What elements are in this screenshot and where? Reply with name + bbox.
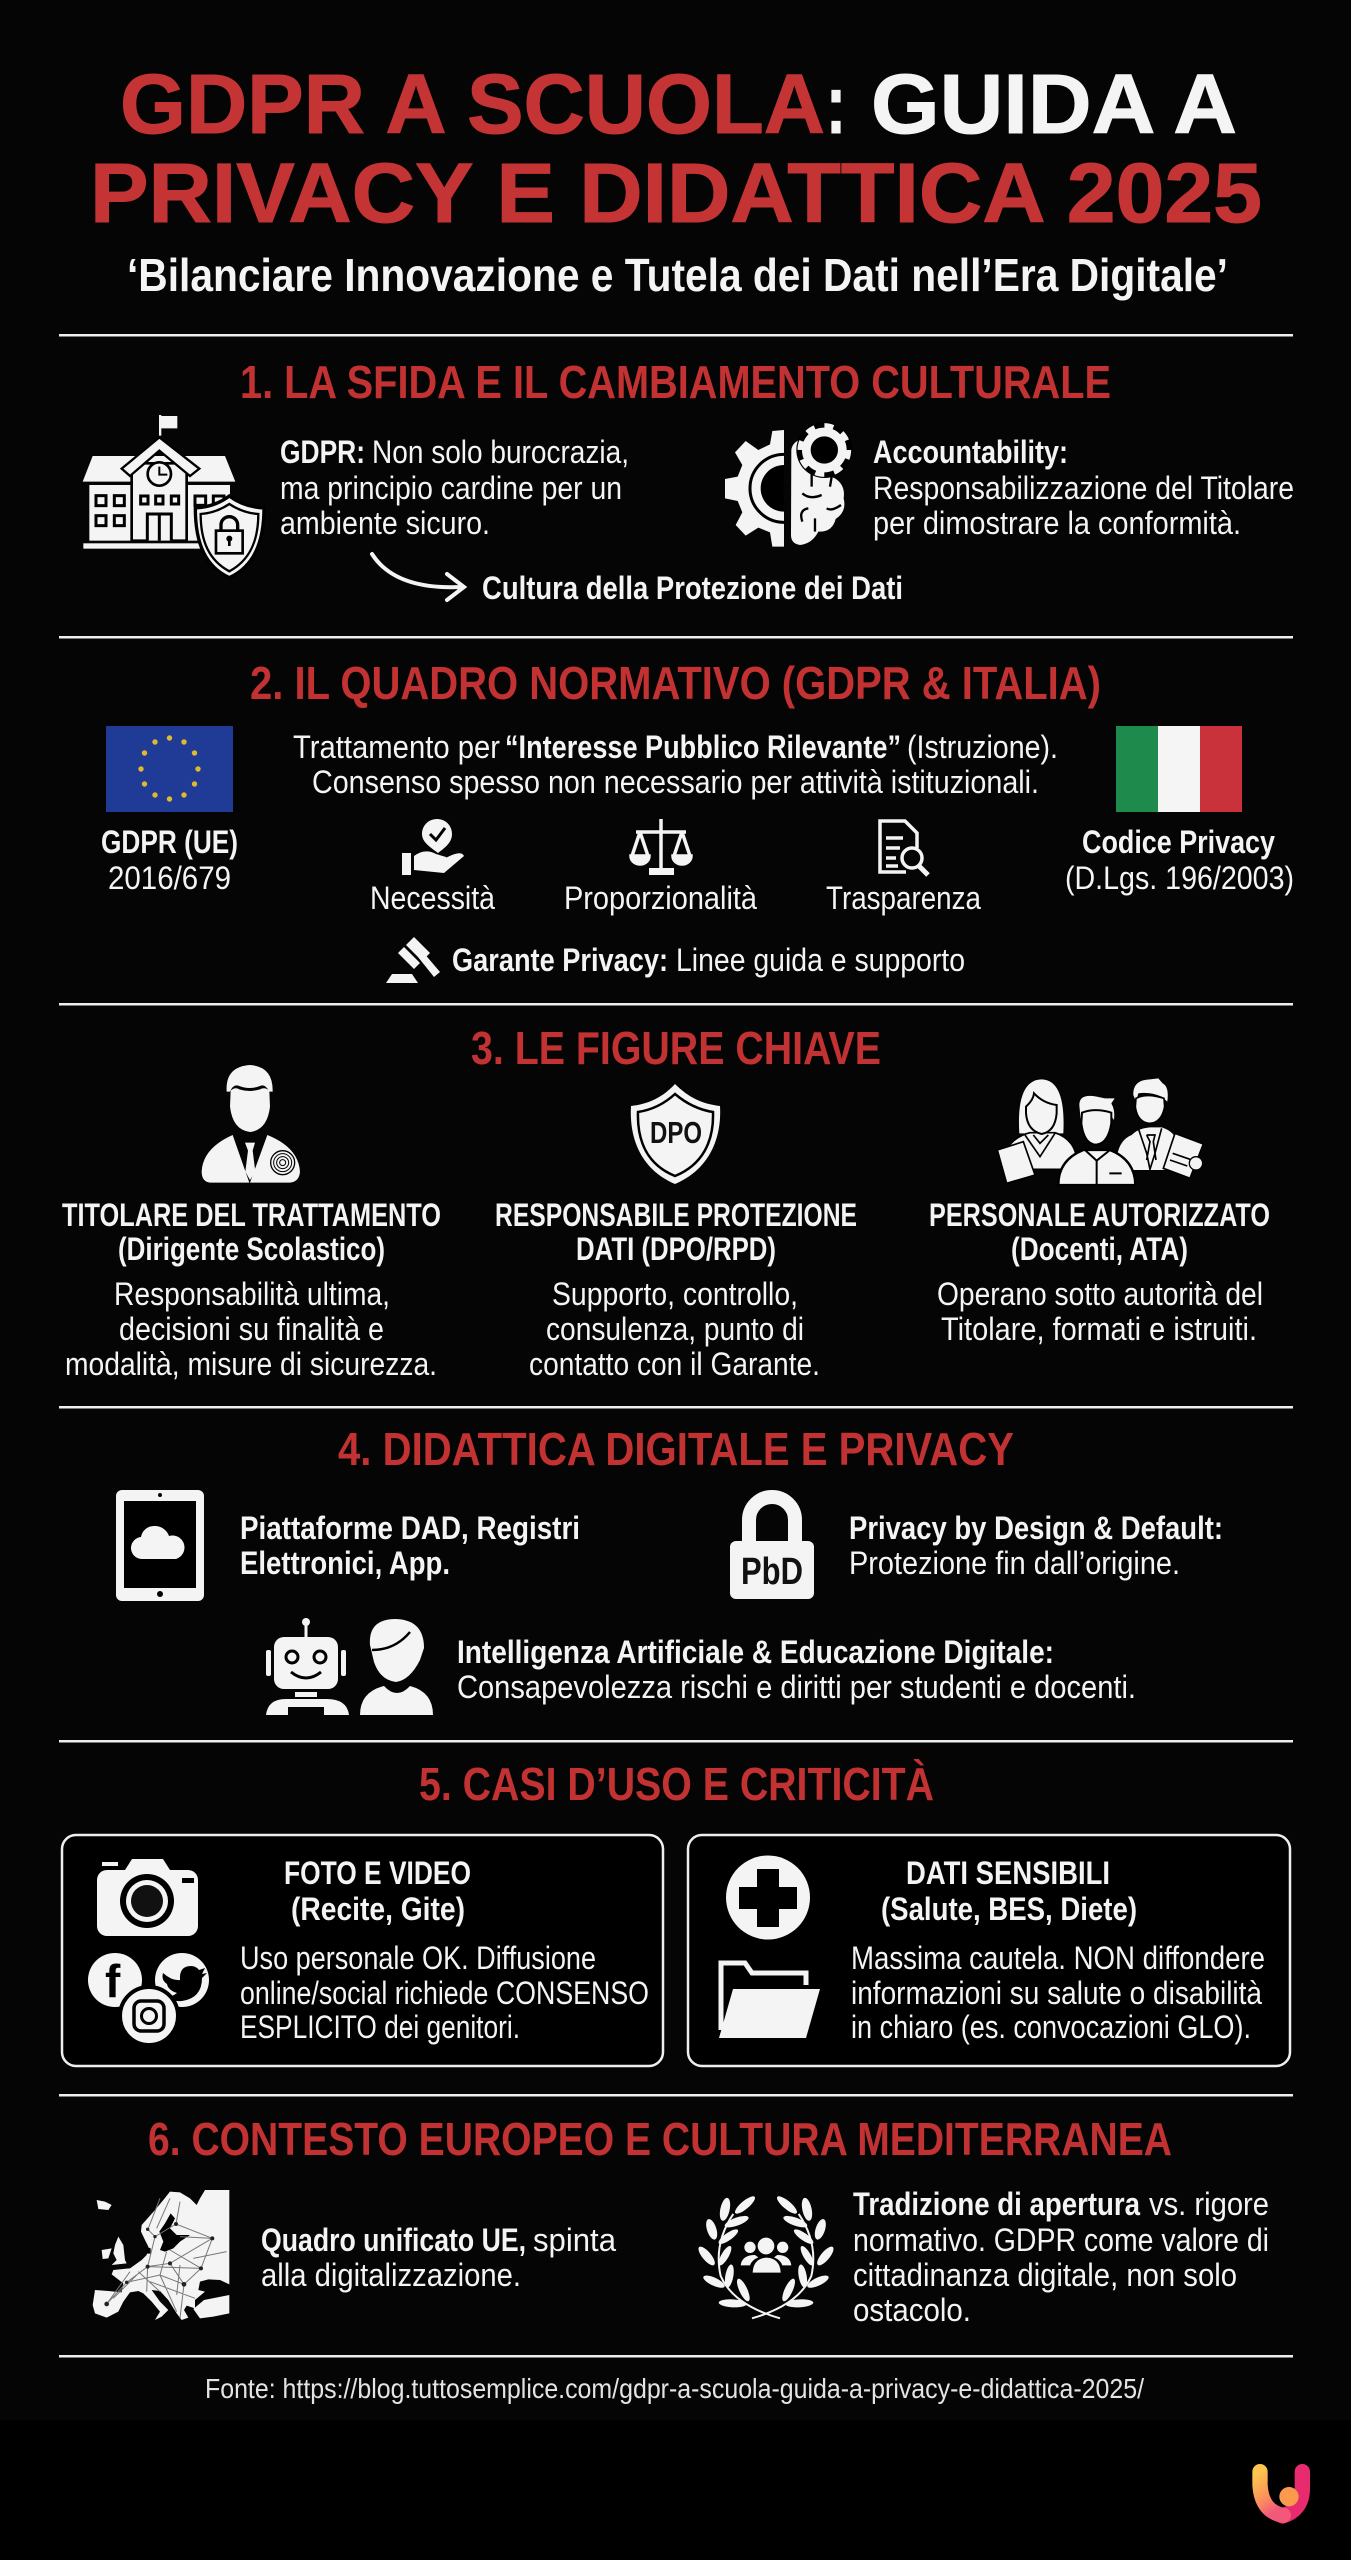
title: GUIDA A — [871, 57, 1237, 151]
icon: tablet with cloud — [116, 1490, 204, 1601]
icon: Italian flag — [1116, 726, 1242, 812]
text: sensitive data: Massima cautela. NON diffondere — [851, 1940, 1265, 1976]
label: proporzionalità: Proporzionalità — [564, 880, 757, 916]
text: Mediterranean tradition: ostacolo. — [853, 2292, 971, 2328]
label: trasparenza: Trasparenza — [826, 880, 981, 916]
callout: culture: Cultura della Protezione dei Dati — [482, 570, 903, 606]
text: accountability: per dimostrare la conformità. — [873, 505, 1241, 541]
heading: section 2: 2. IL QUADRO NORMATIVO (GDPR & ITALIA) — [250, 657, 1101, 709]
icon: school with shield — [83, 415, 264, 578]
text: GDPR: ma principio cardine per un — [280, 470, 622, 506]
heading: section 6: 6. CONTESTO EUROPEO E CULTURA MEDITERRANEA — [148, 2113, 1172, 2165]
text: photo and video: FOTO E VIDEO — [284, 1855, 471, 1891]
heading: section 1: 1. LA SFIDA E IL CAMBIAMENTO CULTURALE — [240, 356, 1111, 408]
text: sensitive data — [851, 1855, 1265, 2045]
text: Mediterranean tradition: normativo. GDPR come valore di — [853, 2222, 1269, 2258]
title: PRIVACY E DIDATTICA 2025 — [90, 146, 1262, 240]
text: Garante: Garante Privacy: — [452, 942, 668, 978]
text: photo and video: (Recite, Gite) — [291, 1891, 465, 1927]
text: platforms: Elettronici, App. — [240, 1545, 450, 1581]
text: GDPR: Non solo burocrazia, — [372, 434, 629, 470]
text: sensitive data: in chiaro (es. convocazioni GLO). — [851, 2009, 1251, 2045]
label: necessità: Necessità — [370, 880, 495, 916]
text: Titolare: modalità, misure di sicurezza. — [65, 1346, 437, 1382]
text: public interest: Consenso spesso non necessario per attività istituzionali. — [312, 764, 1039, 800]
icon: scales — [631, 819, 691, 875]
text: public interest — [293, 729, 1058, 800]
text: privacy by design: Protezione fin dall’origine. — [849, 1545, 1180, 1581]
icon: staff group — [997, 1078, 1203, 1185]
icon: hand with check — [402, 819, 464, 875]
text: accountability: Responsabilizzazione del Titolare — [873, 470, 1294, 506]
source line: Fonte: https://blog.tuttosemplice.com/gdpr-a-scuola-guida-a-privacy-e-didattica-2025/ — [205, 2373, 1144, 2404]
text: DPO: Supporto, controllo, — [552, 1276, 798, 1312]
text: DPO: DATI (DPO/RPD) — [576, 1231, 776, 1267]
panel: section 5 — [62, 1758, 1290, 2066]
text: GDPR: GDPR: — [280, 434, 365, 470]
text: privacy by design: Privacy by Design & Default: — [849, 1510, 1223, 1546]
text: sensitive data: DATI SENSIBILI — [906, 1855, 1110, 1891]
icon: PbD padlock: PbD — [741, 1551, 803, 1593]
title — [90, 57, 1262, 240]
text: photo and video: online/social richiede CONSENSO — [240, 1975, 649, 2011]
label: GDPR UE: 2016/679 — [108, 860, 231, 896]
heading: section 5: 5. CASI D’USO E CRITICITÀ — [419, 1758, 934, 1810]
text: Garante — [452, 942, 965, 978]
text: Titolare: (Dirigente Scolastico) — [118, 1231, 385, 1267]
text: EU framework: Quadro unificato UE, — [261, 2222, 526, 2258]
arrow — [372, 554, 464, 600]
icon: gavel — [386, 937, 440, 983]
text: photo and video: Uso personale OK. Diffusione — [240, 1940, 596, 1976]
subtitle: ‘Bilanciare Innovazione e Tutela dei Dati nell’Era Digitale’ — [127, 249, 1228, 301]
panel: section 3 — [62, 1022, 1270, 1382]
label: GDPR UE: GDPR (UE) — [101, 824, 238, 860]
icon: folder — [719, 1963, 820, 2038]
panel: section 2 — [101, 657, 1294, 983]
icon: camera — [97, 1859, 198, 1936]
icon: medical cross — [726, 1856, 810, 1940]
text: GDPR: ambiente sicuro. — [280, 505, 490, 541]
text: Garante: Linee guida e supporto — [676, 942, 965, 978]
text: EU framework: spinta — [533, 2222, 616, 2258]
panel: section 4 — [116, 1423, 1223, 1715]
text: personale autorizzato — [929, 1197, 1270, 1347]
heading: section 4: 4. DIDATTICA DIGITALE E PRIVACY — [338, 1423, 1014, 1475]
text: EU framework: alla digitalizzazione. — [261, 2257, 521, 2293]
text: accountability — [873, 434, 1294, 541]
icon: social networks — [88, 1953, 209, 2045]
icon: DPO shield: DPO — [650, 1115, 702, 1150]
label: Codice Privacy: Codice Privacy — [1082, 824, 1275, 860]
icon: DPO shield — [631, 1084, 720, 1184]
heading: section 3: 3. LE FIGURE CHIAVE — [471, 1022, 881, 1074]
text: platforms: Piattaforme DAD, Registri — [240, 1510, 580, 1546]
text: public interest: “Interesse Pubblico Rilevante” — [505, 729, 901, 765]
text: DPO: RESPONSABILE PROTEZIONE — [495, 1197, 857, 1233]
text: accountability: Accountability: — [873, 434, 1068, 470]
text: Mediterranean tradition — [853, 2186, 1269, 2328]
text: Mediterranean tradition: Tradizione di apertura — [853, 2186, 1140, 2222]
text: personale autorizzato: PERSONALE AUTORIZZATO — [929, 1197, 1270, 1233]
text: AI and digital education — [457, 1634, 1136, 1705]
text: privacy by design — [849, 1510, 1223, 1581]
text: sensitive data: informazioni su salute o disabilità — [851, 1975, 1262, 2011]
icon: logo — [1260, 2472, 1302, 2516]
text: personale autorizzato: (Docenti, ATA) — [1011, 1231, 1188, 1267]
text: sensitive data: (Salute, BES, Diete) — [881, 1891, 1137, 1927]
text: GDPR — [280, 434, 629, 541]
text: Mediterranean tradition: vs. rigore — [1149, 2186, 1269, 2222]
icon: document with magnifier — [880, 821, 928, 875]
text: Titolare: TITOLARE DEL TRATTAMENTO — [62, 1197, 441, 1233]
text: AI and digital education: Intelligenza Artificiale & Educazione Digitale: — [457, 1634, 1054, 1670]
title: : — [826, 57, 846, 151]
title: GDPR A SCUOLA — [120, 57, 825, 151]
label: GDPR UE — [101, 824, 238, 896]
icon: gear and brain — [725, 422, 852, 547]
text: Titolare: Responsabilità ultima, — [114, 1276, 390, 1312]
label: Codice Privacy — [1065, 824, 1294, 896]
text: Titolare: decisioni su finalità e — [119, 1311, 384, 1347]
panel: section 1 — [83, 356, 1294, 606]
text: platforms — [240, 1510, 580, 1581]
text: public interest: (Istruzione). — [907, 729, 1058, 765]
icon: robot and student — [266, 1618, 433, 1715]
text: DPO: contatto con il Garante. — [529, 1346, 820, 1382]
icon: laurel wreath with people — [696, 2194, 836, 2318]
text: Titolare — [62, 1197, 441, 1382]
text: DPO: consulenza, punto di — [546, 1311, 804, 1347]
text: personale autorizzato: Titolare, formati e istruiti. — [941, 1311, 1257, 1347]
icon: EU flag — [106, 726, 233, 812]
panel: section 6 — [93, 2113, 1269, 2328]
text: AI and digital education: Consapevolezza rischi e diritti per studenti e docenti. — [457, 1669, 1136, 1705]
panel: photo and video — [62, 1835, 663, 2066]
text: photo and video — [240, 1855, 649, 2045]
label: Codice Privacy: (D.Lgs. 196/2003) — [1065, 860, 1294, 896]
icon: school head — [202, 1065, 300, 1183]
icon: social networks: f — [105, 1955, 121, 2007]
icon: map of Europe — [93, 2190, 229, 2320]
text: DPO — [495, 1197, 857, 1382]
icon: PbD padlock — [730, 1497, 814, 1599]
text: public interest: Trattamento per — [293, 729, 500, 765]
text: Mediterranean tradition: cittadinanza digitale, non solo — [853, 2257, 1237, 2293]
text: EU framework — [261, 2222, 616, 2293]
text: photo and video: ESPLICITO dei genitori. — [240, 2009, 520, 2045]
panel: sensitive data — [688, 1835, 1290, 2066]
text: personale autorizzato: Operano sotto autorità del — [937, 1276, 1263, 1312]
